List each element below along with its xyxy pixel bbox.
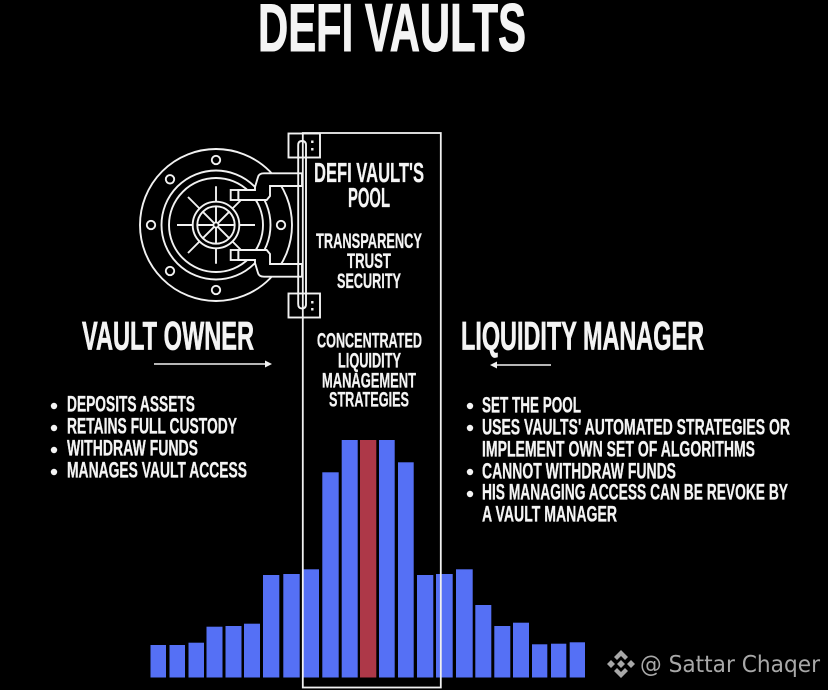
list: vault owner duties: DEPOSITS ASSETS [67,392,195,416]
door capsule [298,141,306,308]
panel: DeFi vault's pool frame [303,133,441,688]
pool strategies text: CONCENTRATED [317,330,422,352]
pool strategies text [317,330,422,412]
pool strategies text: MANAGEMENT [322,370,416,392]
arrow: owner to pool [154,360,272,368]
pool heading: POOL [348,182,390,213]
wheel [177,186,255,264]
active price bar [360,440,376,678]
watermark text: @ Sattar Chaqer [640,652,821,678]
icon: vault door [140,134,320,318]
pool values text: SECURITY [337,270,401,293]
outer and inner rings [140,149,292,301]
list: vault owner duties: WITHDRAW FUNDS [67,436,198,460]
icon: watermark logo [607,650,635,678]
pool values text: TRUST [347,250,391,273]
list: vault owner duties: RETAINS FULL CUSTODY [67,414,237,438]
upper hinge [238,173,302,200]
list: liquidity manager duties [467,392,790,526]
list: vault owner duties [51,392,247,482]
lower hinge foot [231,250,238,260]
bar chart: liquidity distribution [150,440,585,678]
pool heading: DEFI VAULT'S [314,157,424,188]
pool values text: TRANSPARENCY [316,230,422,253]
pool strategies text: LIQUIDITY [338,350,401,372]
upper hinge foot [231,190,238,200]
list: liquidity manager duties: A VAULT MANAGER [482,502,617,526]
list: liquidity manager duties: SET THE POOL [482,392,581,418]
arrow: manager to pool [490,362,551,368]
bolts [147,156,285,294]
heading: vault owner: VAULT OWNER [82,314,254,358]
pool heading [314,157,424,213]
pool strategies text: STRATEGIES [329,388,409,412]
list: vault owner duties: MANAGES VAULT ACCESS [67,458,247,482]
clamp pins [311,140,313,310]
lower hinge [238,250,302,277]
lower clamp [288,294,320,318]
pool values text [316,230,422,293]
upper clamp [288,134,320,158]
list: liquidity manager duties: CANNOT WITHDRAW FUNDS [482,458,676,484]
